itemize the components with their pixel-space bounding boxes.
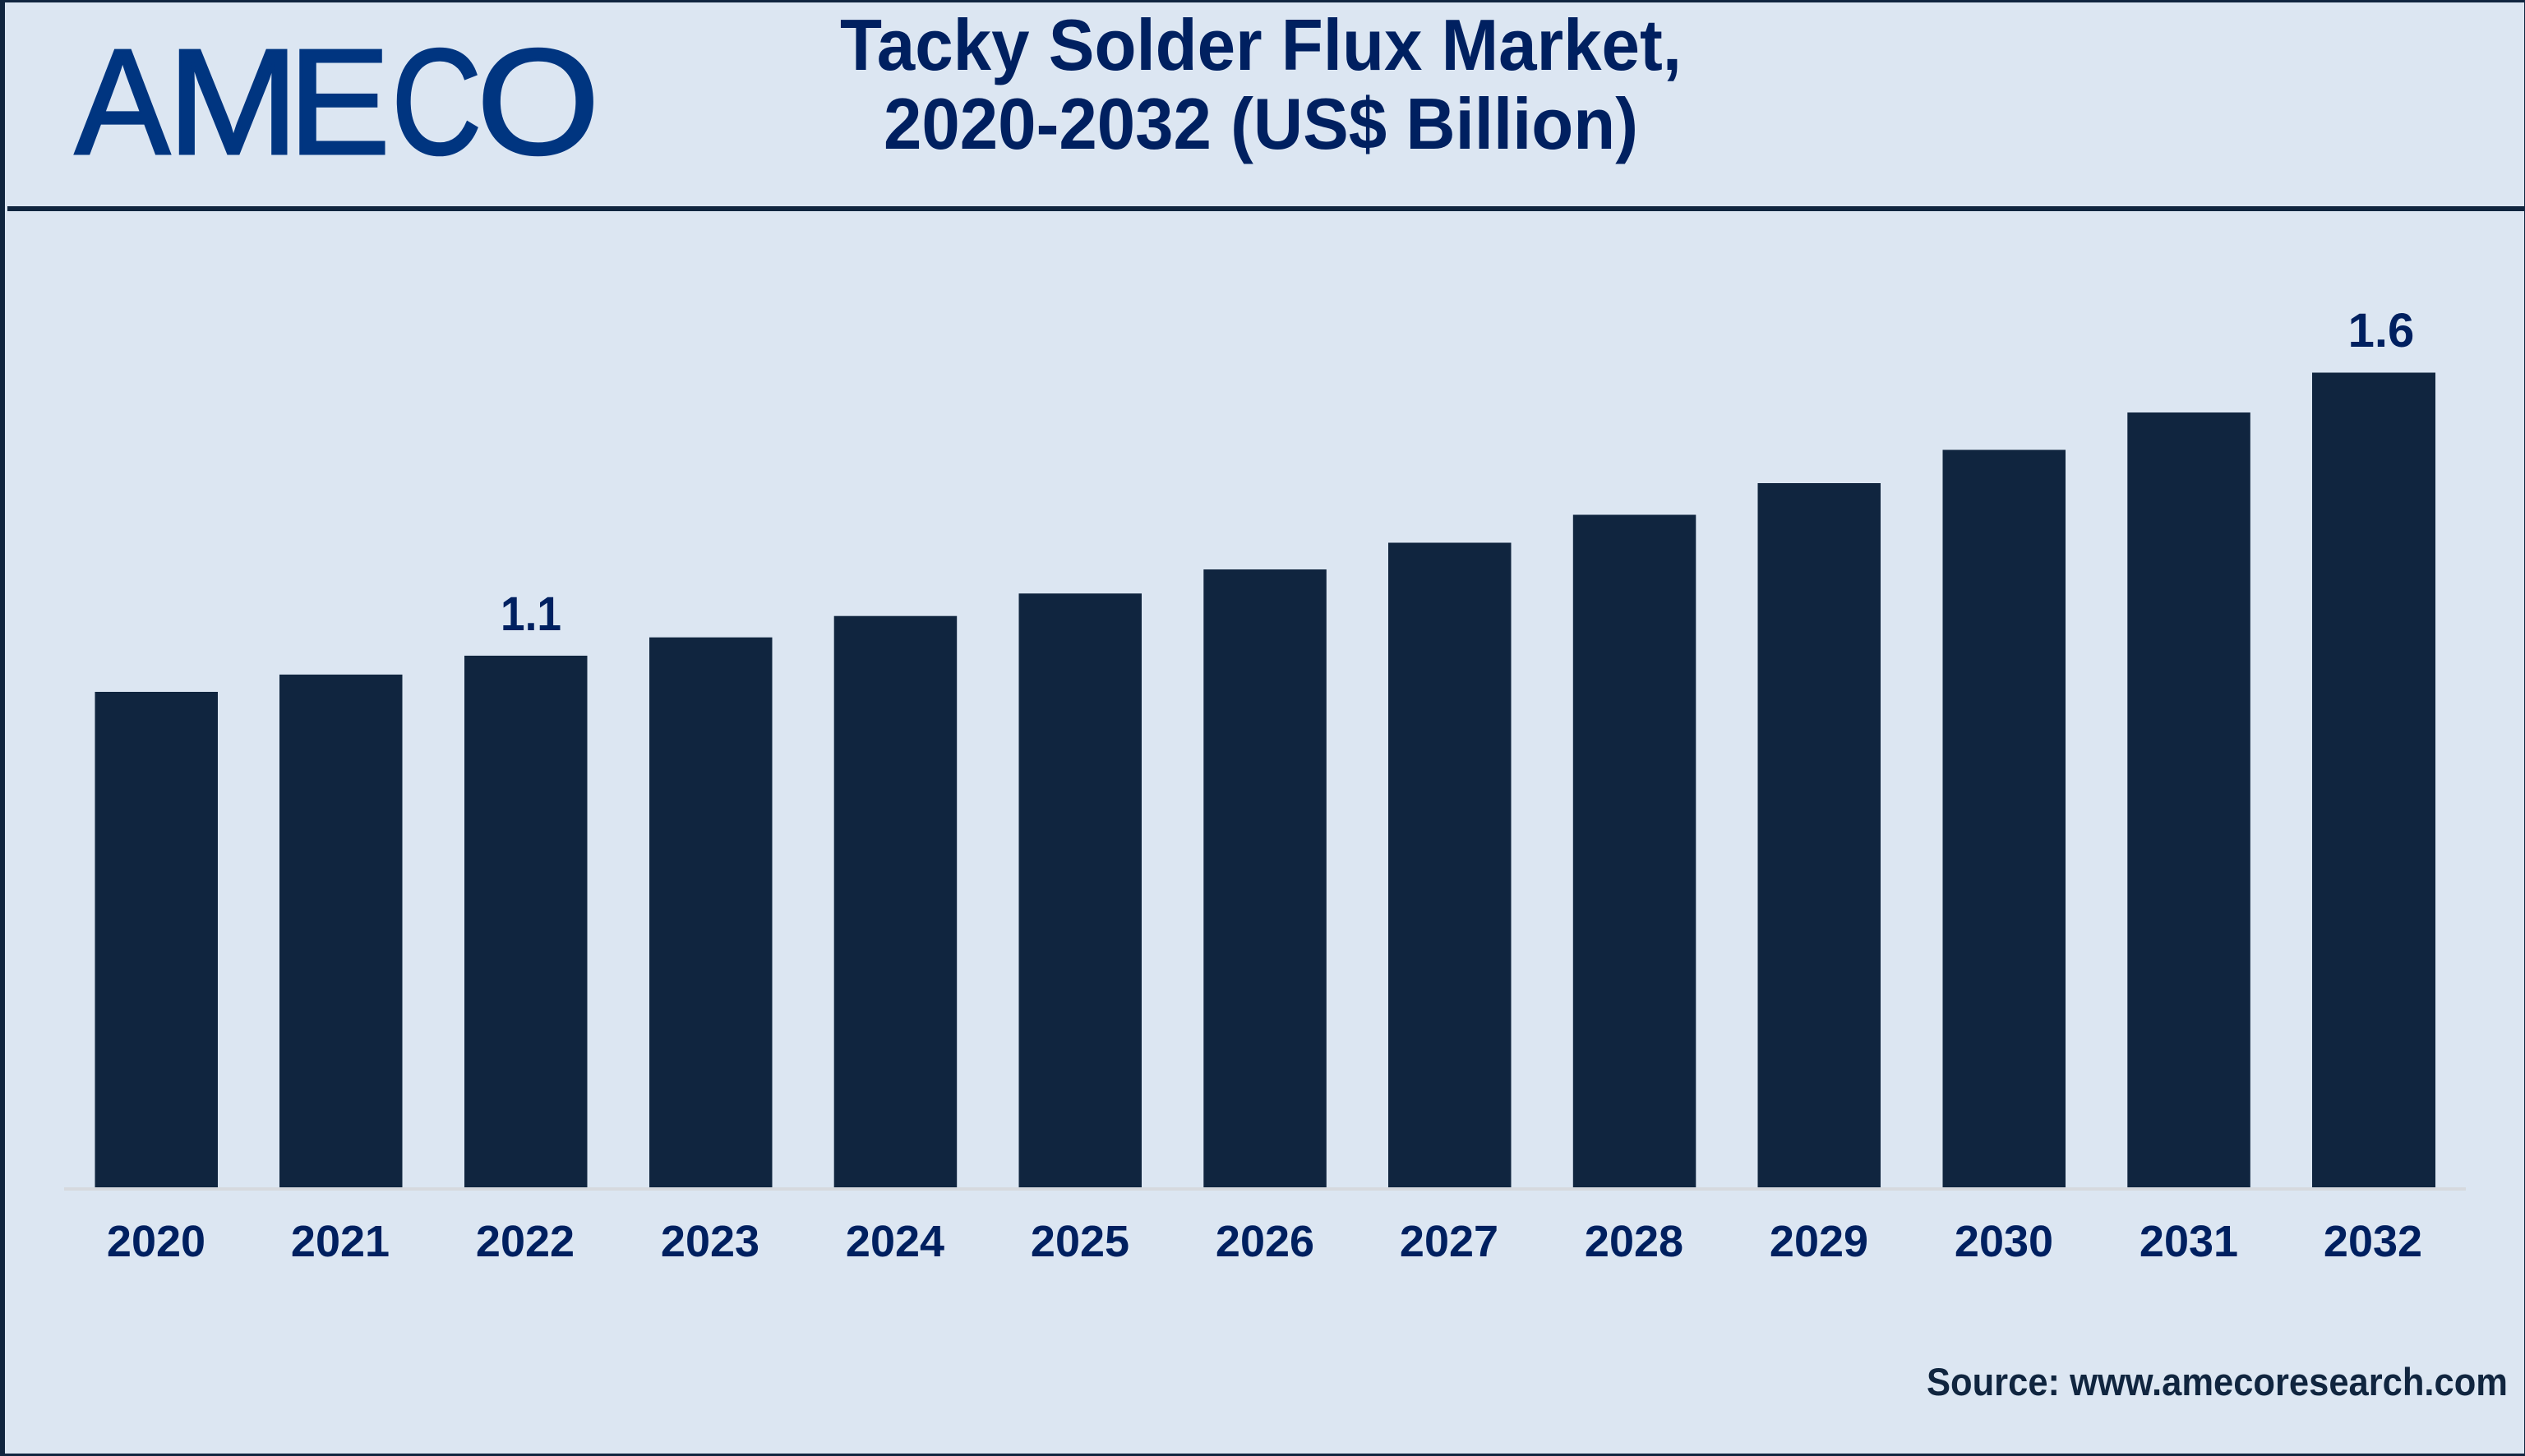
year labels: 2024 bbox=[846, 1217, 944, 1266]
bar 2024 bbox=[834, 616, 957, 1187]
logo: AMECO: A bbox=[75, 17, 170, 186]
bar 2029 bbox=[1757, 483, 1881, 1187]
year labels: 2021 bbox=[291, 1217, 390, 1266]
year labels: 2032 bbox=[2324, 1217, 2422, 1266]
year labels: 2022 bbox=[476, 1217, 575, 1266]
bar 2026 bbox=[1203, 569, 1327, 1187]
year labels: 2029 bbox=[1770, 1217, 1868, 1266]
logo: AMECO: M bbox=[168, 17, 299, 186]
logo: AMECO: C bbox=[391, 18, 482, 186]
year labels: 2023 bbox=[661, 1217, 759, 1266]
bar 2027 bbox=[1388, 542, 1511, 1187]
year labels bbox=[107, 1217, 2422, 1266]
year labels: 2026 bbox=[1216, 1217, 1314, 1266]
bar 2021 bbox=[279, 675, 403, 1187]
year labels: 2025 bbox=[1031, 1217, 1129, 1266]
bar chart bbox=[64, 304, 2466, 1266]
header divider bbox=[7, 206, 2524, 211]
bar 2025 bbox=[1019, 593, 1142, 1187]
title: Tacky Solder Flux Market, bbox=[840, 4, 1682, 85]
x axis line bbox=[64, 1187, 2466, 1191]
value label 1.1: 1.1 bbox=[501, 587, 561, 641]
title: 2020-2032 (US$ Billion) bbox=[884, 83, 1638, 164]
bar 2023 bbox=[649, 638, 773, 1187]
bar 2022 bbox=[464, 656, 587, 1187]
title bbox=[840, 4, 1682, 164]
logo: AMECO: O bbox=[477, 17, 599, 186]
logo: AMECO: E bbox=[288, 19, 390, 187]
bar 2032 bbox=[2312, 373, 2435, 1187]
bar 2031 bbox=[2127, 412, 2250, 1187]
bar 2020 bbox=[95, 692, 218, 1187]
year labels: 2031 bbox=[2140, 1217, 2238, 1266]
year labels: 2027 bbox=[1400, 1217, 1498, 1266]
bar 2030 bbox=[1943, 450, 2066, 1187]
year labels: 2030 bbox=[1955, 1217, 2053, 1266]
year labels: 2020 bbox=[107, 1217, 205, 1266]
value label 1.6: 1.6 bbox=[2348, 304, 2414, 357]
year labels: 2028 bbox=[1585, 1217, 1683, 1266]
logo: AMECO bbox=[75, 17, 599, 187]
bar 2028 bbox=[1573, 514, 1696, 1187]
